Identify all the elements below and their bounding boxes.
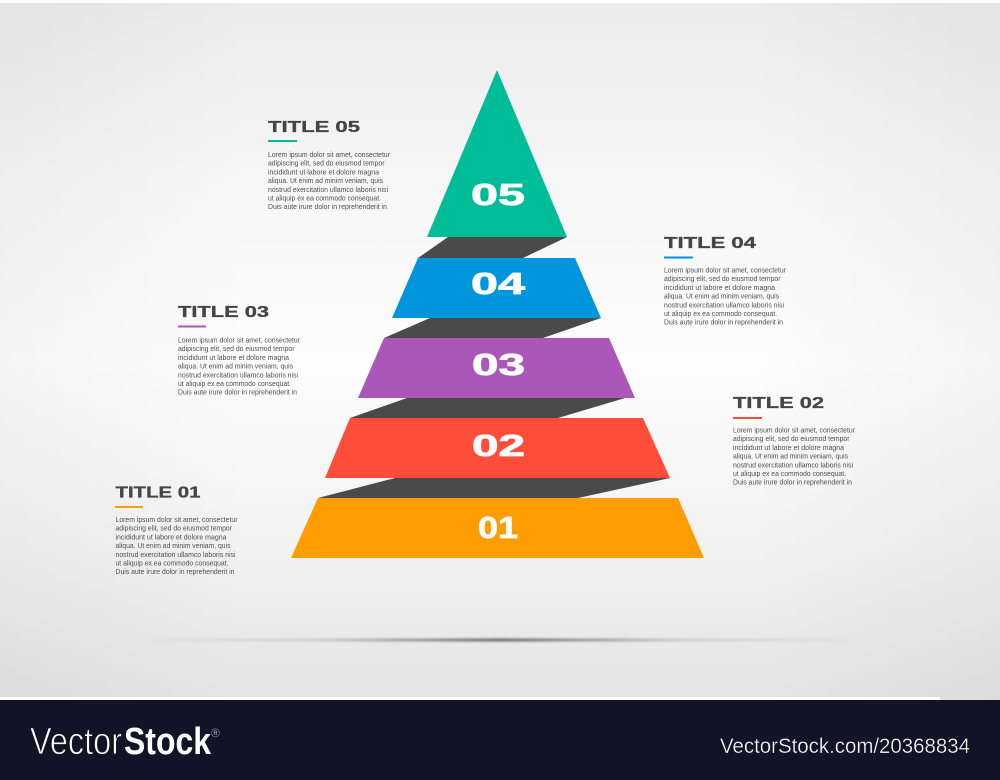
text block: title 05 bbox=[268, 119, 390, 211]
text block: title 02: adipiscing elit, sed do eiusmod tempor bbox=[733, 434, 850, 443]
level 02: 02 bbox=[472, 429, 525, 463]
text block: title 03: incididunt ut labore et dolore magna bbox=[178, 353, 290, 362]
text block: title 05: Lorem ipsum dolor sit amet, consectetur bbox=[268, 150, 390, 159]
footer band bbox=[0, 700, 1000, 780]
text block: title 05: adipiscing elit, sed do eiusmod tempor bbox=[268, 159, 385, 168]
level 02 bbox=[325, 418, 670, 478]
text block: title 03: Lorem ipsum dolor sit amet, consectetur bbox=[178, 336, 300, 344]
text block: title 02: Lorem ipsum dolor sit amet, consectetur bbox=[733, 426, 855, 434]
text block: title 04: nostrud exercitation ullamco laboris nisi bbox=[664, 300, 784, 309]
text block: title 02: TITLE 02 bbox=[733, 395, 824, 412]
text block: title 04: ut aliquip ex ea commodo consequat. bbox=[664, 309, 777, 318]
level 01 bbox=[291, 498, 704, 558]
text block: title 01: Lorem ipsum dolor sit amet, consectetur bbox=[116, 515, 238, 524]
text block: title 02: Duis aute irure dolor in reprehenderit in bbox=[733, 478, 852, 487]
text block: title 01: Duis aute irure dolor in reprehenderit in bbox=[116, 567, 234, 576]
text block: title 05: incididunt ut labore et dolore magna bbox=[268, 167, 380, 176]
text block: title 01: ut aliquip ex ea commodo consequat. bbox=[116, 558, 228, 568]
text block: title 01 bbox=[115, 484, 238, 576]
text block: title 04: Lorem ipsum dolor sit amet, consectetur bbox=[664, 266, 786, 274]
text block: title 04: adipiscing elit, sed do eiusmod tempor bbox=[664, 274, 781, 283]
text block: title 04: TITLE 04 bbox=[664, 235, 757, 252]
brand logo: Stock bbox=[124, 721, 212, 763]
text block: title 02 bbox=[733, 395, 855, 487]
connector shadow 04 to 03 bbox=[384, 318, 601, 338]
connector shadow 05 to 04 bbox=[418, 237, 567, 258]
brand logo: Vector bbox=[30, 721, 122, 763]
bottom edge highlight bbox=[0, 697, 940, 700]
text block: title 04: Duis aute irure dolor in reprehenderit in bbox=[664, 318, 783, 327]
text block: title 04: incididunt ut labore et dolore magna bbox=[664, 283, 776, 292]
level 05 bbox=[427, 70, 567, 237]
top edge highlight bbox=[0, 0, 1000, 3]
text block: title 03: aliqua. Ut enim ad minim veniam, quis bbox=[178, 362, 293, 371]
connector shadow 03 to 02 bbox=[350, 398, 625, 418]
text block: title 01: adipiscing elit, sed do eiusmod tempor bbox=[116, 524, 232, 533]
ground shadow bbox=[130, 638, 870, 642]
brand logo bbox=[30, 721, 220, 763]
text block: title 03: TITLE 03 bbox=[178, 304, 270, 321]
text block: title 02: incididunt ut labore et dolore magna bbox=[733, 443, 845, 452]
text block: title 02: ut aliquip ex ea commodo consequat. bbox=[733, 469, 846, 478]
text block: title 03: ut aliquip ex ea commodo consequat. bbox=[178, 379, 291, 388]
text block: title 01: nostrud exercitation ullamco laboris nisi bbox=[116, 550, 236, 559]
level 04: 04 bbox=[471, 267, 525, 301]
text block: title 04: aliqua. Ut enim ad minim veniam, quis bbox=[664, 292, 779, 301]
text block: title 03 bbox=[178, 304, 300, 397]
text block: title 01: aliqua. Ut enim ad minim veniam, quis bbox=[116, 541, 231, 550]
level 04 bbox=[392, 258, 601, 318]
text block: title 03: Duis aute irure dolor in reprehenderit in bbox=[178, 388, 297, 397]
text block: title 05: aliqua. Ut enim ad minim veniam, quis bbox=[268, 176, 383, 185]
level 03 bbox=[358, 338, 635, 398]
level 05: 05 bbox=[471, 178, 525, 212]
text block: title 01: incididunt ut labore et dolore magna bbox=[116, 532, 227, 541]
text block: title 05: ut aliquip ex ea commodo consequat. bbox=[268, 194, 381, 202]
text block: title 05: Duis aute irure dolor in reprehenderit in bbox=[268, 202, 387, 211]
text block: title 02: aliqua. Ut enim ad minim veniam, quis bbox=[733, 452, 848, 461]
pyramid bbox=[291, 70, 704, 558]
text block: title 01: TITLE 01 bbox=[116, 484, 201, 502]
connector shadow 02 to 01 bbox=[318, 478, 670, 498]
image id: VectorStock.com/20368834 bbox=[720, 734, 970, 758]
text block: title 03: adipiscing elit, sed do eiusmod tempor bbox=[178, 344, 295, 353]
text block: title 04 bbox=[664, 235, 786, 327]
text block: title 05: TITLE 05 bbox=[268, 119, 361, 136]
text block: title 05: nostrud exercitation ullamco laboris nisi bbox=[268, 185, 388, 194]
level 03: 03 bbox=[472, 348, 525, 382]
level 01: 01 bbox=[478, 511, 518, 545]
text block: title 02: nostrud exercitation ullamco laboris nisi bbox=[733, 460, 853, 469]
text block: title 03: nostrud exercitation ullamco laboris nisi bbox=[178, 370, 298, 379]
brand logo: ® bbox=[211, 726, 220, 740]
